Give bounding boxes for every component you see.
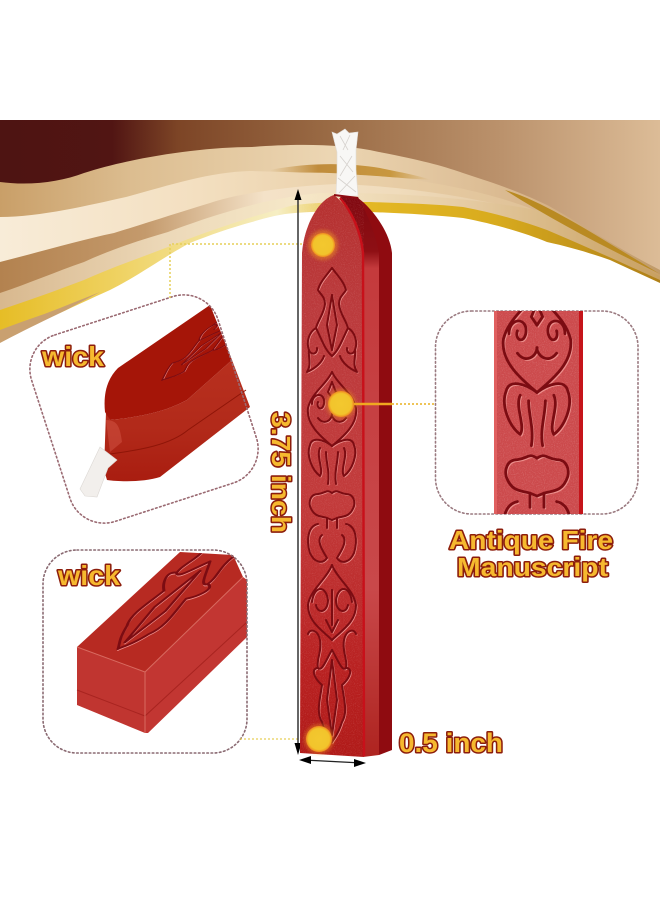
panel: ornament close-up bbox=[434, 310, 639, 515]
infographic bbox=[0, 120, 660, 767]
marker dot: middle bbox=[326, 389, 392, 419]
heading: Antique Fire Manuscript: Antique Fire bbox=[449, 525, 613, 555]
dotted frame bbox=[436, 311, 638, 514]
label: 0.5 inch: 0.5 inch bbox=[399, 728, 503, 758]
enlarged ornament strip bbox=[494, 311, 583, 514]
wick tip bbox=[80, 447, 117, 497]
wax base, angled view bbox=[76, 552, 247, 733]
heading: Antique Fire Manuscript bbox=[449, 525, 613, 582]
wick bbox=[332, 129, 358, 196]
right face bbox=[358, 198, 392, 755]
label: wick: wick bbox=[57, 560, 120, 591]
panel: lower-left base detail bbox=[42, 549, 248, 754]
front face bbox=[300, 195, 364, 757]
marker dot: bottom bbox=[304, 724, 334, 754]
top rim bbox=[334, 195, 358, 198]
ornament bbox=[307, 268, 358, 743]
surface texture bbox=[300, 195, 364, 757]
width arrow bbox=[299, 756, 366, 767]
wax stick bbox=[300, 129, 392, 757]
middle face bbox=[340, 197, 379, 757]
panel: upper-left wick detail bbox=[29, 294, 259, 524]
height arrow bbox=[294, 189, 302, 755]
banner: gold and brown waves bbox=[0, 120, 660, 360]
wax end, angled view bbox=[104, 305, 250, 482]
callout lines bbox=[170, 244, 436, 739]
marker dot: top bbox=[308, 230, 338, 260]
dotted frame bbox=[43, 550, 247, 753]
label: wick: wick bbox=[41, 341, 104, 372]
heading: Antique Fire Manuscript: Manuscript bbox=[457, 552, 608, 582]
dotted frame bbox=[21, 286, 267, 532]
label: 3.75 inch: 3.75 inch bbox=[266, 412, 296, 533]
bright edge bbox=[340, 198, 364, 756]
